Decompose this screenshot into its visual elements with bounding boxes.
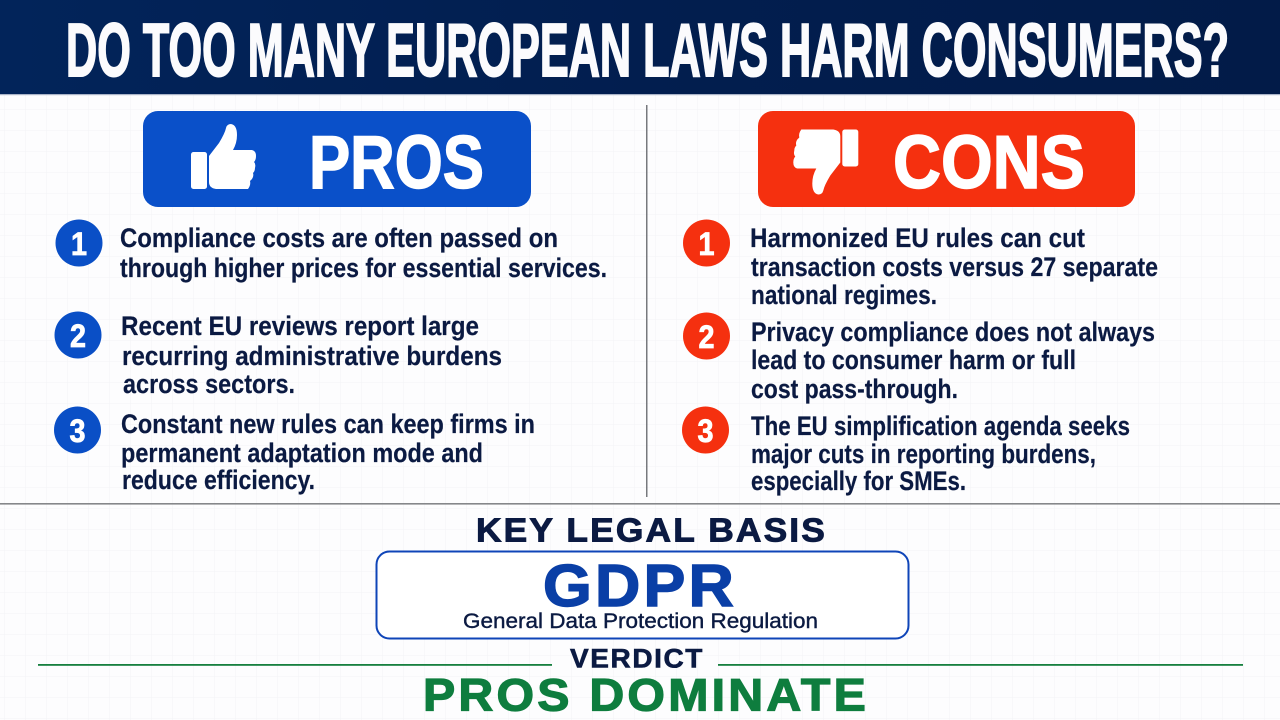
con item 1: transaction costs versus 27 separate (751, 252, 1158, 282)
con item 3 (682, 406, 1130, 496)
con item 1 (683, 220, 1158, 310)
key legal basis heading: KEY LEGAL BASIS (476, 512, 827, 548)
cons heading: CONS (893, 120, 1085, 204)
pro item 2: 2 (70, 318, 86, 354)
pro item 2: recurring administrative burdens (122, 341, 502, 371)
header banner (0, 0, 1280, 95)
pro item 1: through higher prices for essential services. (120, 253, 607, 283)
icon: thumbs up (191, 124, 256, 189)
con item 3: major cuts in reporting burdens, (751, 439, 1096, 469)
con item 2: lead to consumer harm or full (751, 345, 1076, 375)
verdict label: VERDICT (570, 644, 704, 674)
panel: verdict (38, 644, 1243, 720)
con item 1: national regimes. (751, 280, 937, 310)
pro item 3: reduce efficiency. (122, 465, 315, 495)
gdpr box (376, 552, 908, 638)
con item 3: 3 (698, 413, 714, 449)
cons badge (758, 111, 1135, 207)
panel: key legal basis (376, 512, 908, 638)
pro item 2: across sectors. (123, 369, 295, 399)
con item 1: 1 (698, 226, 714, 262)
pro item 1 (56, 220, 607, 283)
pros badge (143, 111, 531, 207)
con item 2: Privacy compliance does not always (751, 317, 1155, 347)
panel: pros (54, 111, 607, 495)
gdpr acronym: GDPR (543, 553, 737, 619)
pro item 2 (54, 311, 502, 399)
con item 2: 2 (698, 319, 714, 355)
panel: cons (682, 111, 1158, 496)
gdpr full name: General Data Protection Regulation (463, 609, 818, 633)
pro item 3 (54, 406, 535, 495)
verdict result: PROS DOMINATE (423, 670, 869, 720)
icon: thumbs down (793, 130, 858, 194)
con item 3: The EU simplification agenda seeks (751, 411, 1130, 441)
pros heading: PROS (309, 120, 484, 204)
pro item 3: permanent adaptation mode and (121, 438, 483, 468)
pro item 1: Compliance costs are often passed on (120, 223, 558, 253)
pro item 3: 3 (70, 413, 86, 449)
pro item 1: 1 (71, 226, 87, 262)
con item 3: especially for SMEs. (751, 466, 966, 496)
con item 1: Harmonized EU rules can cut (750, 223, 1085, 253)
con item 2 (683, 312, 1155, 404)
pro item 3: Constant new rules can keep firms in (121, 409, 535, 439)
con item 2: cost pass-through. (751, 374, 958, 404)
pro item 2: Recent EU reviews report large (121, 311, 479, 341)
